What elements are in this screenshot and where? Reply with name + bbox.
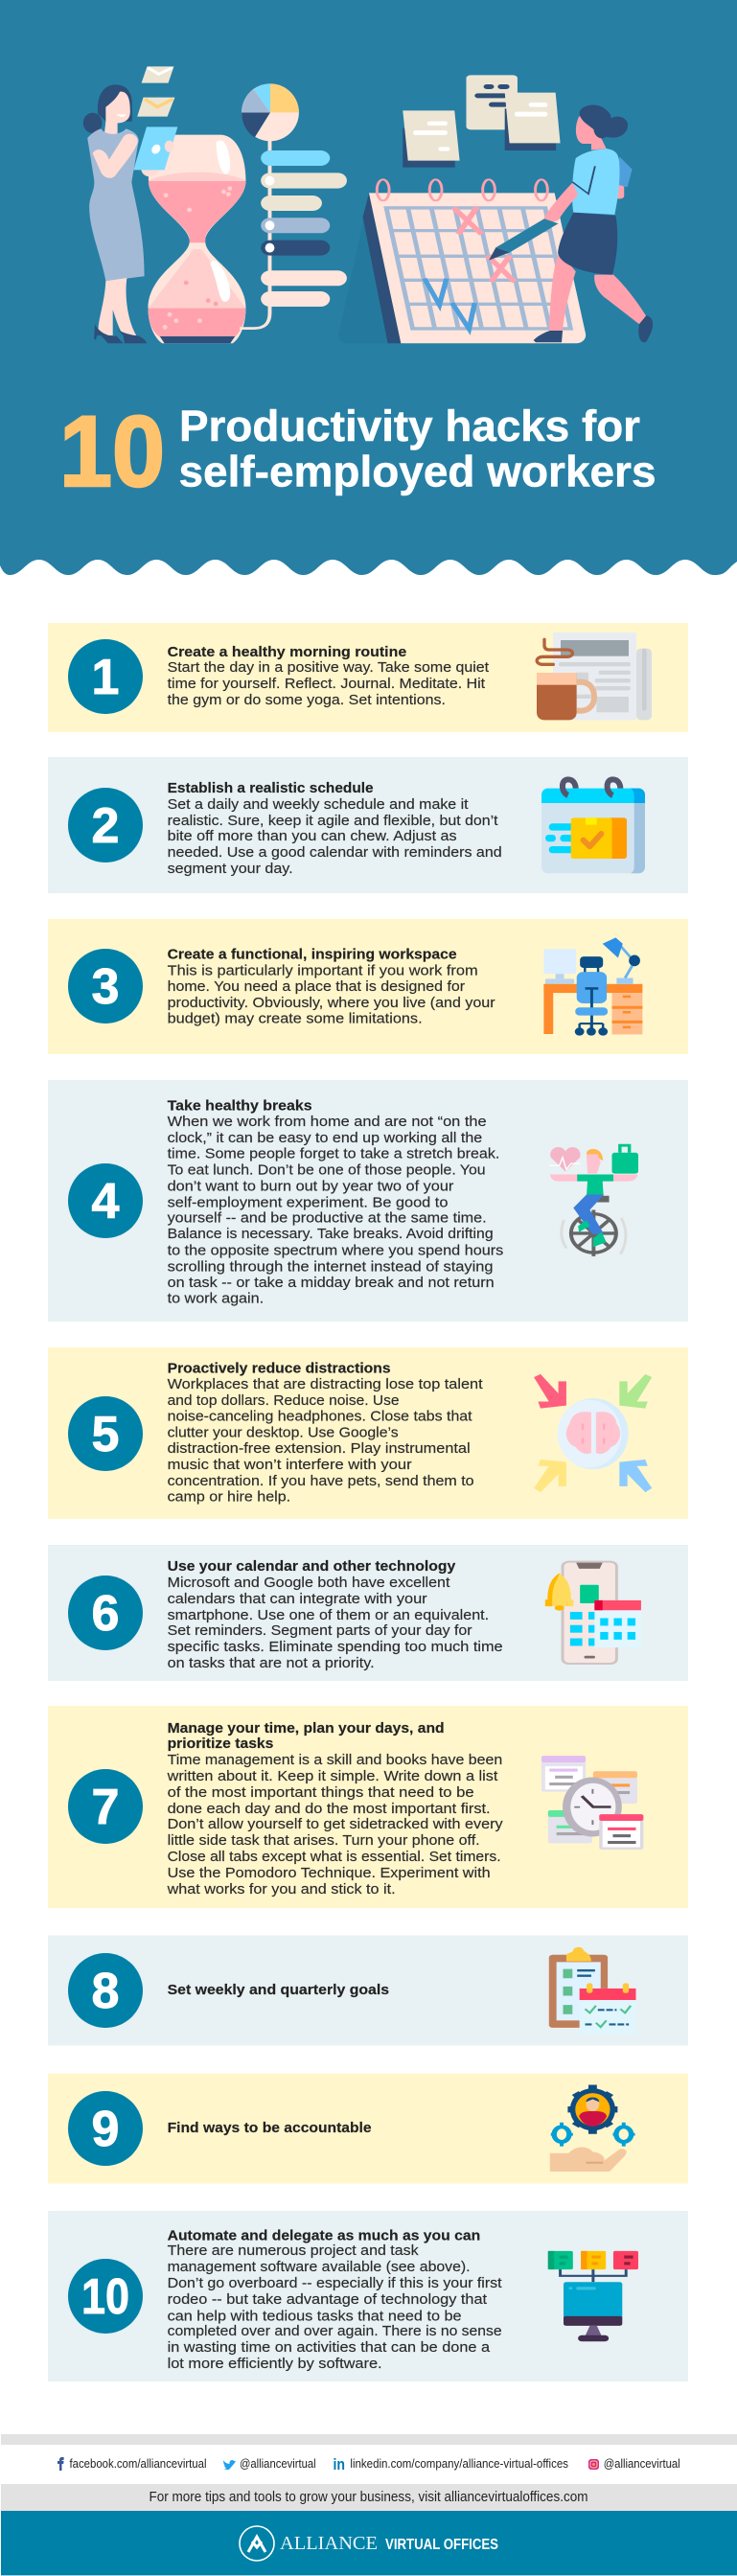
- linkedin handle: linkedin.com/company/alliance-virtual-offices: [350, 2457, 568, 2471]
- tip 7 text: what works for you and stick to it.: [167, 1881, 396, 1898]
- tip 5 text: concentration. If you have pets, send them to: [168, 1473, 474, 1489]
- tip 3 text: This is particularly important if you work from: [168, 962, 478, 979]
- tip 6 text: Microsoft and Google both have excellent: [168, 1575, 450, 1591]
- number badge 9: 9: [92, 2102, 119, 2157]
- tip 7 text: Close all tabs except what is essential. Set timers.: [168, 1849, 501, 1865]
- tip 6 text: Set reminders. Segment parts of your day for: [168, 1622, 472, 1639]
- tip 3 text: Create a functional, inspiring workspace: [168, 947, 457, 962]
- number badge 9: [68, 2091, 143, 2166]
- tip 6 text: Use your calendar and other technology: [168, 1558, 456, 1575]
- tip 6 text: smartphone. Use one of them or an equivalent.: [168, 1607, 489, 1623]
- tip 4 text: [168, 1098, 503, 1307]
- tip 6 text: [168, 1558, 503, 1671]
- number badge 3: 3: [92, 959, 119, 1015]
- tip 4 text: scrolling through the internet instead of staying: [168, 1259, 494, 1275]
- woman with pencil: [489, 105, 653, 342]
- tip 4 text: Balance is necessary. Take breaks. Avoid drifting: [168, 1226, 494, 1242]
- social links row: [58, 2455, 680, 2473]
- tip 10 text: rodeo -- but take advantage of technology that: [168, 2291, 488, 2308]
- tip 10 text: [168, 2227, 502, 2372]
- hourglass: [148, 135, 245, 343]
- icon: clock with task cards: [541, 1756, 643, 1850]
- tip 4 text: Take healthy breaks: [168, 1098, 312, 1114]
- icon: balancing on a unicycle: [550, 1145, 638, 1256]
- number badge 6: [68, 1576, 143, 1650]
- instagram handle: @alliancevirtual: [604, 2457, 680, 2471]
- tip 8 text: Set weekly and quarterly goals: [168, 1982, 389, 1998]
- tip 7 text: Use the Pomodoro Technique. Experiment with: [168, 1865, 491, 1881]
- header banner with wavy bottom edge: [0, 0, 737, 575]
- tip 4 text: to work again.: [168, 1290, 264, 1307]
- icon: hand holding gears and person: [550, 2085, 635, 2172]
- icon: instagram: [588, 2459, 599, 2470]
- tip 6 text: calendars that can integrate with your: [168, 1591, 427, 1607]
- tip 3 text: [168, 947, 495, 1027]
- tip 5 text: camp or hire help.: [168, 1489, 290, 1505]
- number badge 3: [68, 949, 143, 1024]
- footer logo band: [1, 2511, 737, 2576]
- number badge 7: 7: [92, 1780, 119, 1835]
- tip 5 text: Proactively reduce distractions: [168, 1361, 391, 1376]
- tip 4 text: time. Some people forget to take a stretch break.: [168, 1146, 499, 1162]
- tip 7 text: Time management is a skill and books have been: [168, 1752, 502, 1768]
- icon: newspaper and coffee: [537, 632, 652, 720]
- number badge 1: 1: [92, 650, 119, 705]
- number badge 8: 8: [92, 1964, 119, 2019]
- tip 10 text: Automate and delegate as much as you can: [168, 2227, 480, 2244]
- logo wordmark: ALLIANCE: [280, 2533, 378, 2554]
- icon: monitor with connected boxes: [548, 2251, 638, 2341]
- title: [59, 396, 656, 508]
- sticky notes: [403, 75, 561, 168]
- number badge 6: 6: [92, 1586, 119, 1642]
- tip 4 text: clock,” it can be easy to end up working all the: [168, 1130, 482, 1146]
- number badge 7: [68, 1769, 143, 1844]
- panel: tip 2: [48, 757, 688, 893]
- number badge 2: [68, 788, 143, 862]
- tip 5 text: clutter your desktop. Use Google’s: [168, 1424, 399, 1441]
- twitter handle: @alliancevirtual: [240, 2457, 316, 2471]
- icon: phone, bell and calendar: [545, 1562, 641, 1664]
- title: 10: [59, 396, 165, 508]
- tip 5 text: distraction-free extension. Play instrumental: [168, 1440, 471, 1457]
- panel: tip 9: [48, 2074, 688, 2183]
- number badge 5: [68, 1396, 143, 1471]
- tip 2 text: [168, 780, 502, 877]
- icon: linkedin: in: [334, 2455, 345, 2473]
- title: Productivity hacks for: [179, 402, 640, 450]
- tip 4 text: yourself -- and be productive at the same time.: [168, 1209, 487, 1227]
- icon: brain with converging arrows: [534, 1374, 652, 1492]
- tip 7 text: little side task that arises. Turn your phone off.: [168, 1832, 480, 1849]
- tip 1 text: [168, 644, 490, 708]
- number badge 10: 10: [81, 2269, 129, 2325]
- tip 5 text: [168, 1361, 483, 1505]
- number badge 1: [68, 639, 143, 714]
- tip 7 text: of the most important things that need to be: [168, 1784, 474, 1801]
- tip 5 text: music that won’t interfere with your: [168, 1457, 412, 1473]
- tip 10 text: There are numerous project and task: [168, 2242, 419, 2259]
- icon: twitter: [223, 2460, 236, 2470]
- panel: tip 3: [48, 919, 688, 1054]
- tip 7 text: done each day and do the most important first.: [168, 1801, 491, 1817]
- tip 5 text: and top dollars. Reduce noise. Use: [168, 1392, 400, 1409]
- panel: tip 4: [48, 1080, 688, 1322]
- tip 7 text: Don’t allow yourself to get sidetracked with every: [168, 1816, 503, 1832]
- tip 2 text: bite off more than you can chew. Adjust as: [168, 828, 457, 844]
- tip 7 text: [167, 1720, 503, 1898]
- tip 10 text: completed over and over again. There is no sense: [168, 2323, 502, 2339]
- number badge 2: 2: [92, 798, 119, 854]
- panel: tip 10: [48, 2211, 688, 2381]
- tip 1 text: Create a healthy morning routine: [168, 644, 406, 660]
- tip 5 text: Workplaces that are distracting lose top talent: [168, 1376, 483, 1392]
- tip 3 text: budget) may create some limitations.: [168, 1010, 423, 1027]
- tip 4 text: to the opposite spectrum where you spend hours: [168, 1242, 503, 1259]
- panel: tip 8: [48, 1936, 688, 2045]
- tip 10 text: lot more efficiently by software.: [168, 2356, 382, 2372]
- call to action band: For more tips and tools to grow your business, visit alliancevirtualoffices.com: [150, 2489, 588, 2505]
- pie chart and stacked pill bars: [240, 83, 347, 329]
- envelope icons: [137, 66, 174, 117]
- tip 2 text: Establish a realistic schedule: [168, 780, 374, 796]
- tip 9 text: Find ways to be accountable: [168, 2120, 372, 2136]
- icon: clipboard and calendar: [549, 1947, 636, 2035]
- panel: tip 1: [48, 623, 688, 732]
- title: self-employed workers: [178, 447, 656, 496]
- wall calendar: [338, 179, 586, 343]
- tip 4 text: To eat lunch. Don’t be one of those people. You: [168, 1162, 486, 1179]
- tip 3 text: home. You need a place that is designed for: [168, 978, 465, 995]
- tip 4 text: self-employment experiment. Be good to: [168, 1194, 448, 1211]
- number badge 4: 4: [92, 1174, 120, 1230]
- tip 3 text: productivity. Obviously, where you live (and your: [168, 995, 495, 1011]
- tip 1 text: the gym or do some yoga. Set intentions.: [168, 692, 446, 708]
- woman with tablet: [83, 84, 177, 343]
- tip 2 text: needed. Use a good calendar with reminders and: [168, 844, 502, 861]
- tip 4 text: on task -- or take a midday break and not return: [168, 1275, 495, 1291]
- tip 2 text: Set a daily and weekly schedule and make it: [168, 796, 469, 813]
- call to action band: [1, 2484, 737, 2511]
- tip 4 text: When we work from home and are not “on the: [168, 1114, 487, 1130]
- tip 2 text: realistic. Sure, keep it agile and flexible, but don’t: [168, 813, 498, 829]
- number badge 8: [68, 1953, 143, 2028]
- tip 10 text: in wasting time on activities that can be done a: [168, 2339, 491, 2356]
- facebook handle: facebook.com/alliancevirtual: [69, 2457, 207, 2471]
- icon: facebook: [58, 2457, 64, 2471]
- panel: tip 6: [48, 1545, 688, 1681]
- number badge 4: [68, 1163, 143, 1238]
- logo mark: [240, 2526, 274, 2561]
- tip 10 text: can help with tedious tasks that need to be: [168, 2308, 462, 2325]
- logo wordmark: [280, 2533, 498, 2554]
- logo wordmark: VIRTUAL OFFICES: [385, 2537, 498, 2553]
- icon: calendar with checked folder: [541, 779, 645, 873]
- tip 7 text: prioritize tasks: [168, 1736, 273, 1752]
- icon: desk and chair: [543, 937, 642, 1036]
- tip 6 text: on tasks that are not a priority.: [168, 1655, 375, 1671]
- number badge 5: 5: [92, 1407, 119, 1462]
- tip 2 text: segment your day.: [168, 861, 293, 877]
- hero illustration: [83, 66, 653, 343]
- tip 7 text: Manage your time, plan your days, and: [168, 1720, 445, 1736]
- number badge 10: [68, 2259, 143, 2334]
- tip 10 text: Don’t go overboard -- especially if this is your first: [168, 2275, 502, 2291]
- footer grey band: [1, 2434, 737, 2445]
- tip 1 text: Start the day in a positive way. Take some quiet: [168, 659, 490, 676]
- tip 7 text: written about it. Keep it simple. Write down a list: [167, 1768, 498, 1784]
- panel: tip 7: [48, 1706, 688, 1908]
- tip 1 text: time for yourself. Reflect. Journal. Meditate. Hit: [168, 676, 486, 692]
- tip 10 text: management software available (see above).: [168, 2259, 471, 2275]
- tip 4 text: don’t want to burn out by year two of your: [168, 1179, 453, 1194]
- tip 5 text: noise-canceling headphones. Close tabs that: [168, 1409, 472, 1424]
- panel: tip 5: [48, 1347, 688, 1519]
- tip 6 text: specific tasks. Eliminate spending too much time: [168, 1639, 503, 1655]
